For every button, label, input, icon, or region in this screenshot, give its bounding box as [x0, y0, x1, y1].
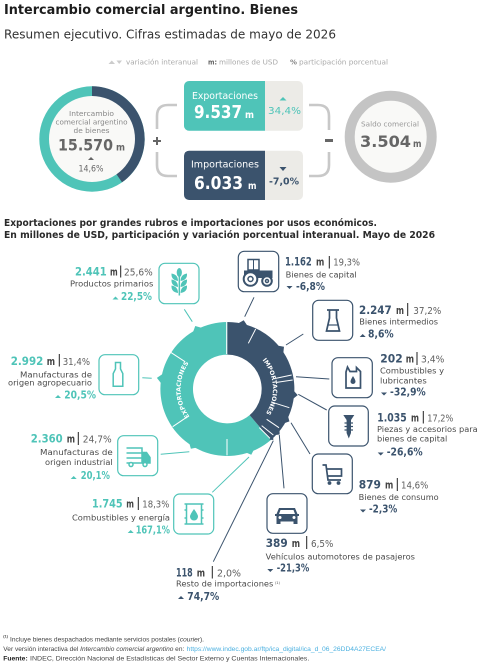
item: bienes de consumo: 879 — [359, 478, 381, 492]
item: manufacturas de origen industrial: 20,1% — [81, 470, 110, 482]
item: bienes intermedios — [313, 300, 441, 341]
footnotes: Incluye bienes despachados mediante servicios postales ( courier ). — [10, 637, 204, 643]
section heading: En millones de USD, participación y variación porcentual interanual. Mayo de 2026 — [4, 230, 435, 241]
item: bienes intermedios: 2.247 — [359, 303, 392, 317]
total trade donut: 14,6% — [78, 165, 104, 175]
panel: imports: -7,0% — [269, 177, 299, 188]
footnotes: Fuente: — [3, 657, 28, 663]
item: bienes intermedios: Bienes intermedios — [359, 318, 438, 327]
legend — [108, 58, 388, 66]
panel: exports: 34,4% — [268, 106, 301, 117]
panel: imports — [184, 151, 303, 200]
item: manufacturas de origen industrial: 2.360 — [31, 432, 63, 446]
exports ring label: EXPORTACIONES — [176, 362, 190, 419]
icon: truck — [126, 448, 150, 466]
panel: imports: 6.033 — [194, 173, 243, 194]
panel: imports: m — [248, 181, 257, 192]
item: combustibles y lubricantes: -32,9% — [390, 387, 426, 399]
item: manufacturas de origen agropecuario: 31,4% — [63, 357, 90, 368]
leader lines — [142, 297, 329, 562]
plus bracket — [153, 105, 177, 176]
item: resto de importaciones: 74,7% — [187, 591, 220, 603]
item: manufacturas de origen industrial — [31, 432, 158, 482]
item: combustibles y lubricantes — [332, 352, 444, 399]
item: resto de importaciones: m — [197, 568, 205, 580]
section heading — [4, 218, 435, 241]
icon: flask — [326, 310, 340, 331]
footnotes: (1) — [3, 634, 9, 638]
item: resto de importaciones — [176, 566, 281, 603]
item: productos primarios: Productos primarios — [70, 280, 153, 289]
panel: exports: 9.537 — [194, 102, 242, 123]
item: bienes intermedios: m — [396, 305, 404, 317]
legend: variación interanual — [126, 58, 198, 66]
item: piezas y accesorios: 17,2% — [427, 414, 453, 425]
item: manufacturas de origen agropecuario: m — [47, 356, 55, 368]
item: combustibles y lubricantes: lubricantes — [380, 377, 427, 386]
item: productos primarios: 25,6% — [124, 268, 153, 279]
item: combustibles y lubricantes: Combustibles y — [380, 367, 444, 376]
item: bienes de consumo — [312, 454, 439, 516]
trade balance circle: 3.504 — [360, 132, 411, 151]
item: vehiculos automotores: 389 — [266, 536, 288, 550]
item: bienes de capital: -6,8% — [296, 281, 325, 293]
item: combustibles y lubricantes: 202 — [380, 352, 403, 366]
item: vehiculos automotores: 6,5% — [311, 539, 333, 550]
item: productos primarios: 22,5% — [121, 291, 152, 303]
item: resto de importaciones: 2,0% — [217, 569, 241, 580]
panel: exports — [184, 81, 303, 131]
total trade donut: comercial argentino — [56, 117, 128, 126]
item: productos primarios — [70, 263, 199, 304]
icon: oil can — [346, 367, 360, 388]
exports arc — [156, 322, 271, 456]
item: combustibles y energia — [72, 494, 214, 536]
item: piezas y accesorios — [329, 406, 478, 459]
imports ring label: IMPORTACIONES — [262, 358, 278, 415]
item: combustibles y lubricantes: m — [406, 354, 414, 366]
item: bienes de capital: 19,3% — [333, 258, 360, 269]
item: bienes de consumo: Bienes de consumo — [359, 493, 439, 502]
item: bienes de capital — [238, 251, 360, 293]
icon: screw — [343, 415, 354, 438]
item: manufacturas de origen agropecuario: Manufacturas de — [20, 370, 92, 379]
item: combustibles y energia: Combustibles y energía — [72, 514, 170, 523]
item: productos primarios: m — [110, 267, 118, 279]
item: combustibles y lubricantes: 3,4% — [421, 355, 444, 366]
item: bienes de capital: 1.162 — [285, 255, 312, 269]
panel: imports: Importaciones — [191, 160, 259, 171]
item: bienes de capital: Bienes de capital — [286, 271, 357, 280]
item: vehiculos automotores: -21,3% — [277, 563, 310, 575]
icon: wheat — [171, 268, 187, 296]
footnotes: Ver versión interactiva del Intercambio comercial argentino en: — [3, 647, 185, 653]
item: productos primarios: 2.441 — [75, 265, 107, 279]
item: vehiculos automotores: m — [292, 538, 300, 550]
item: bienes de consumo: -2,3% — [369, 504, 398, 516]
item: bienes de consumo: m — [385, 480, 393, 492]
item: piezas y accesorios: Piezas y accesorios para — [377, 425, 478, 434]
item: bienes de capital: m — [316, 257, 324, 269]
item: combustibles y energia: 167,1% — [136, 524, 170, 536]
icon: bottle — [113, 362, 123, 386]
footnotes — [3, 634, 386, 663]
icon: shopping cart — [322, 465, 342, 485]
item: resto de importaciones: (1) — [275, 580, 281, 585]
item: piezas y accesorios: -26,6% — [387, 447, 423, 459]
legend: m: — [208, 58, 217, 66]
item: manufacturas de origen industrial: origen industrial — [45, 458, 113, 467]
legend: participación porcentual — [299, 58, 388, 66]
panel: exports: m — [245, 110, 254, 121]
item: piezas y accesorios: m — [411, 413, 419, 425]
trade balance circle: Saldo comercial — [361, 120, 419, 129]
item: manufacturas de origen industrial: m — [67, 434, 75, 446]
item: combustibles y energia: 1.745 — [92, 497, 123, 511]
section heading: Exportaciones por grandes rubros e importaciones por usos económicos. — [4, 218, 377, 229]
total trade donut: 15.570 — [58, 136, 113, 155]
legend: millones de USD — [219, 58, 278, 66]
item: bienes intermedios: 37,2% — [413, 306, 441, 317]
item: combustibles y energia: 18,3% — [142, 500, 169, 511]
item: manufacturas de origen agropecuario: 2.992 — [11, 354, 43, 368]
total trade donut — [39, 86, 145, 192]
panel: exports: Exportaciones — [192, 91, 258, 102]
legend: % — [290, 58, 297, 66]
central donut chart — [156, 320, 298, 456]
item: piezas y accesorios: 1.035 — [377, 411, 407, 425]
trade balance circle — [350, 96, 432, 178]
item: resto de importaciones: 118 — [176, 566, 193, 580]
minus bracket — [309, 105, 333, 176]
item: manufacturas de origen industrial: 24,7% — [83, 435, 112, 446]
item: piezas y accesorios: bienes de capital — [377, 435, 447, 444]
title: Intercambio comercial argentino. Bienes — [4, 3, 298, 18]
item: bienes intermedios: 8,6% — [368, 329, 394, 341]
imports arc — [227, 319, 298, 442]
item: manufacturas de origen agropecuario: origen agropecuario — [8, 379, 92, 388]
icon: tractor — [244, 260, 272, 286]
total trade donut: m — [116, 143, 125, 154]
item: bienes de consumo: 14,6% — [401, 481, 428, 492]
item: vehiculos automotores: Vehículos automotores de pasajeros — [266, 552, 415, 561]
icon: car — [275, 508, 299, 524]
item: resto de importaciones: Resto de importaciones — [176, 580, 273, 589]
item: manufacturas de origen agropecuario — [8, 354, 139, 401]
trade balance circle: m — [413, 139, 422, 150]
total trade donut: de bienes — [74, 126, 110, 135]
item: vehiculos automotores — [266, 494, 415, 575]
item: manufacturas de origen agropecuario: 20,5% — [64, 389, 96, 401]
item: combustibles y energia: m — [126, 499, 134, 511]
item: manufacturas de origen industrial: Manufacturas de — [40, 448, 113, 457]
icon: barrel — [184, 504, 204, 524]
subtitle: Resumen ejecutivo. Cifras estimadas de mayo de 2026 — [4, 26, 336, 42]
footnotes: https://www.indec.gob.ar/ftp/ica_digital/ica_d_06_26DD4A27ECEA/ — [187, 647, 386, 653]
total trade donut: Intercambio — [69, 109, 114, 118]
footnotes: INDEC, Dirección Nacional de Estadísticas del Sector Externo y Cuentas Internacionales. — [30, 657, 310, 663]
